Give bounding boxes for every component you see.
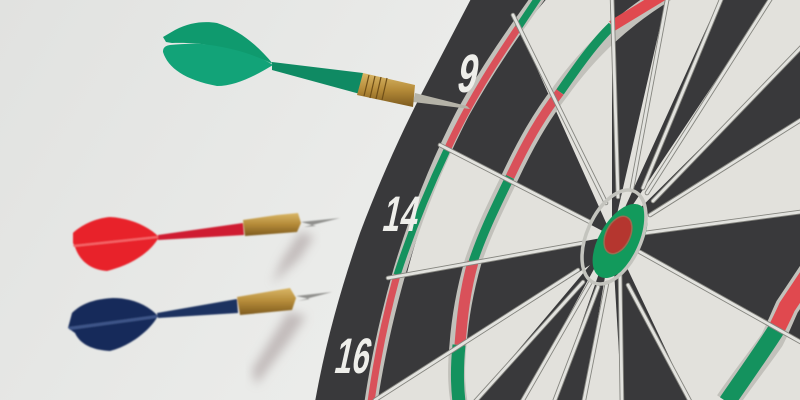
cream segments: [375, 0, 800, 400]
double ring: [371, 0, 540, 400]
dart shadows on wall: [252, 232, 314, 385]
number 9: 9: [453, 43, 485, 104]
bull wire ring: [569, 180, 659, 294]
bullseye red: [598, 212, 638, 258]
blue flight: [68, 298, 158, 351]
blue vane highlight: [68, 315, 157, 330]
green lower vane: [163, 44, 273, 86]
blue barrel: [237, 288, 296, 315]
wire spider: [375, 0, 800, 400]
red needle: [301, 218, 340, 227]
red barrel: [243, 213, 301, 236]
red flight: [73, 217, 159, 271]
blue dart: [68, 288, 332, 351]
green dart: [163, 22, 470, 109]
red shaft: [158, 223, 244, 240]
blue shaft: [157, 299, 238, 318]
outer bull green: [581, 195, 659, 287]
number 14: 14: [378, 186, 425, 242]
treble ring: [457, 0, 800, 400]
red vane highlight: [73, 236, 158, 247]
number 16: 16: [330, 328, 377, 384]
blue needle: [296, 292, 332, 301]
red dart: [73, 213, 340, 271]
green shaft: [272, 62, 363, 94]
green upper vane: [163, 22, 273, 64]
green barrel: [357, 73, 415, 107]
board surround: [315, 0, 800, 400]
dartboard: [315, 0, 800, 400]
green needle: [413, 93, 470, 109]
wire highlights: [375, 0, 800, 400]
